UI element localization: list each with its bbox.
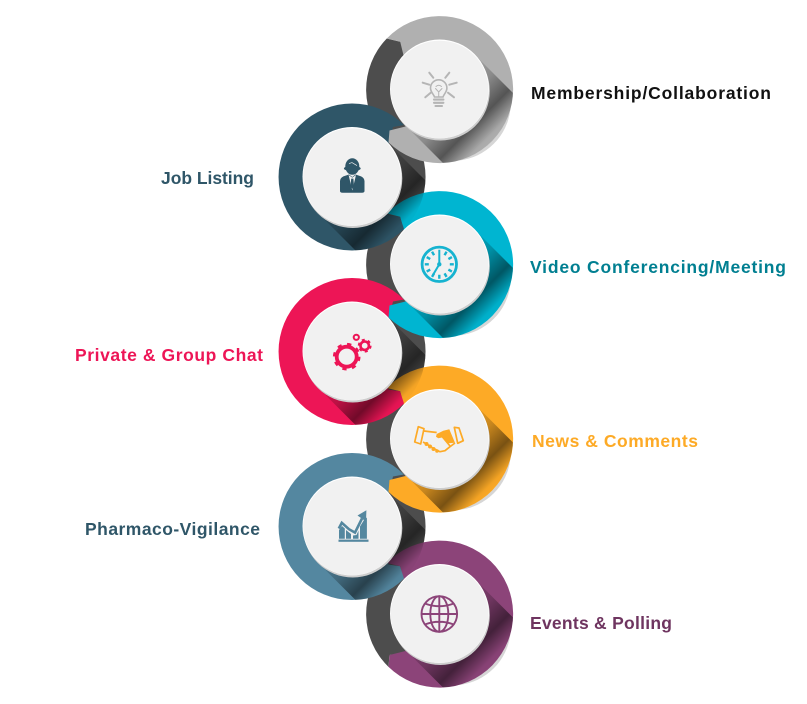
arc: news [387,366,513,513]
disc: private chat [302,302,402,402]
arc: private chat [279,278,404,425]
label: Private & Group Chat: Private & Group Chat [75,345,263,365]
icon: globe [421,596,457,632]
icon: person [340,158,364,193]
arc: membership [387,16,513,163]
disc: pharmaco-vigilance [302,476,402,578]
disc: job listing [302,127,402,228]
label: Events & Polling: Events & Polling [530,613,672,633]
disc: news [390,389,490,490]
dark ring segments [366,38,426,667]
label: News & Comments: News & Comments [532,431,698,451]
icon: handshake [415,427,463,453]
disc: events [390,564,490,665]
label: Membership/Collaboration: Membership/Collaboration [531,83,771,103]
disc: video [390,214,490,316]
long shadows [324,60,513,688]
icon: light bulb [423,73,457,106]
icon: gears [334,335,371,369]
icon: growth chart [338,510,368,542]
label: Pharmaco-Vigilance: Pharmaco-Vigilance [85,519,260,539]
label: Video Conferencing/Meeting: Video Conferencing/Meeting [530,257,786,277]
disc: membership [390,40,490,140]
label: Job Listing: Job Listing [161,168,254,188]
arc: job listing [279,103,404,250]
arc: video [387,191,513,338]
pale edge crescents [371,108,510,685]
coloured ring arcs [279,16,513,688]
arc: pharmaco-vigilance [279,453,404,600]
icon: clock [422,247,456,282]
arc: events [387,541,513,688]
